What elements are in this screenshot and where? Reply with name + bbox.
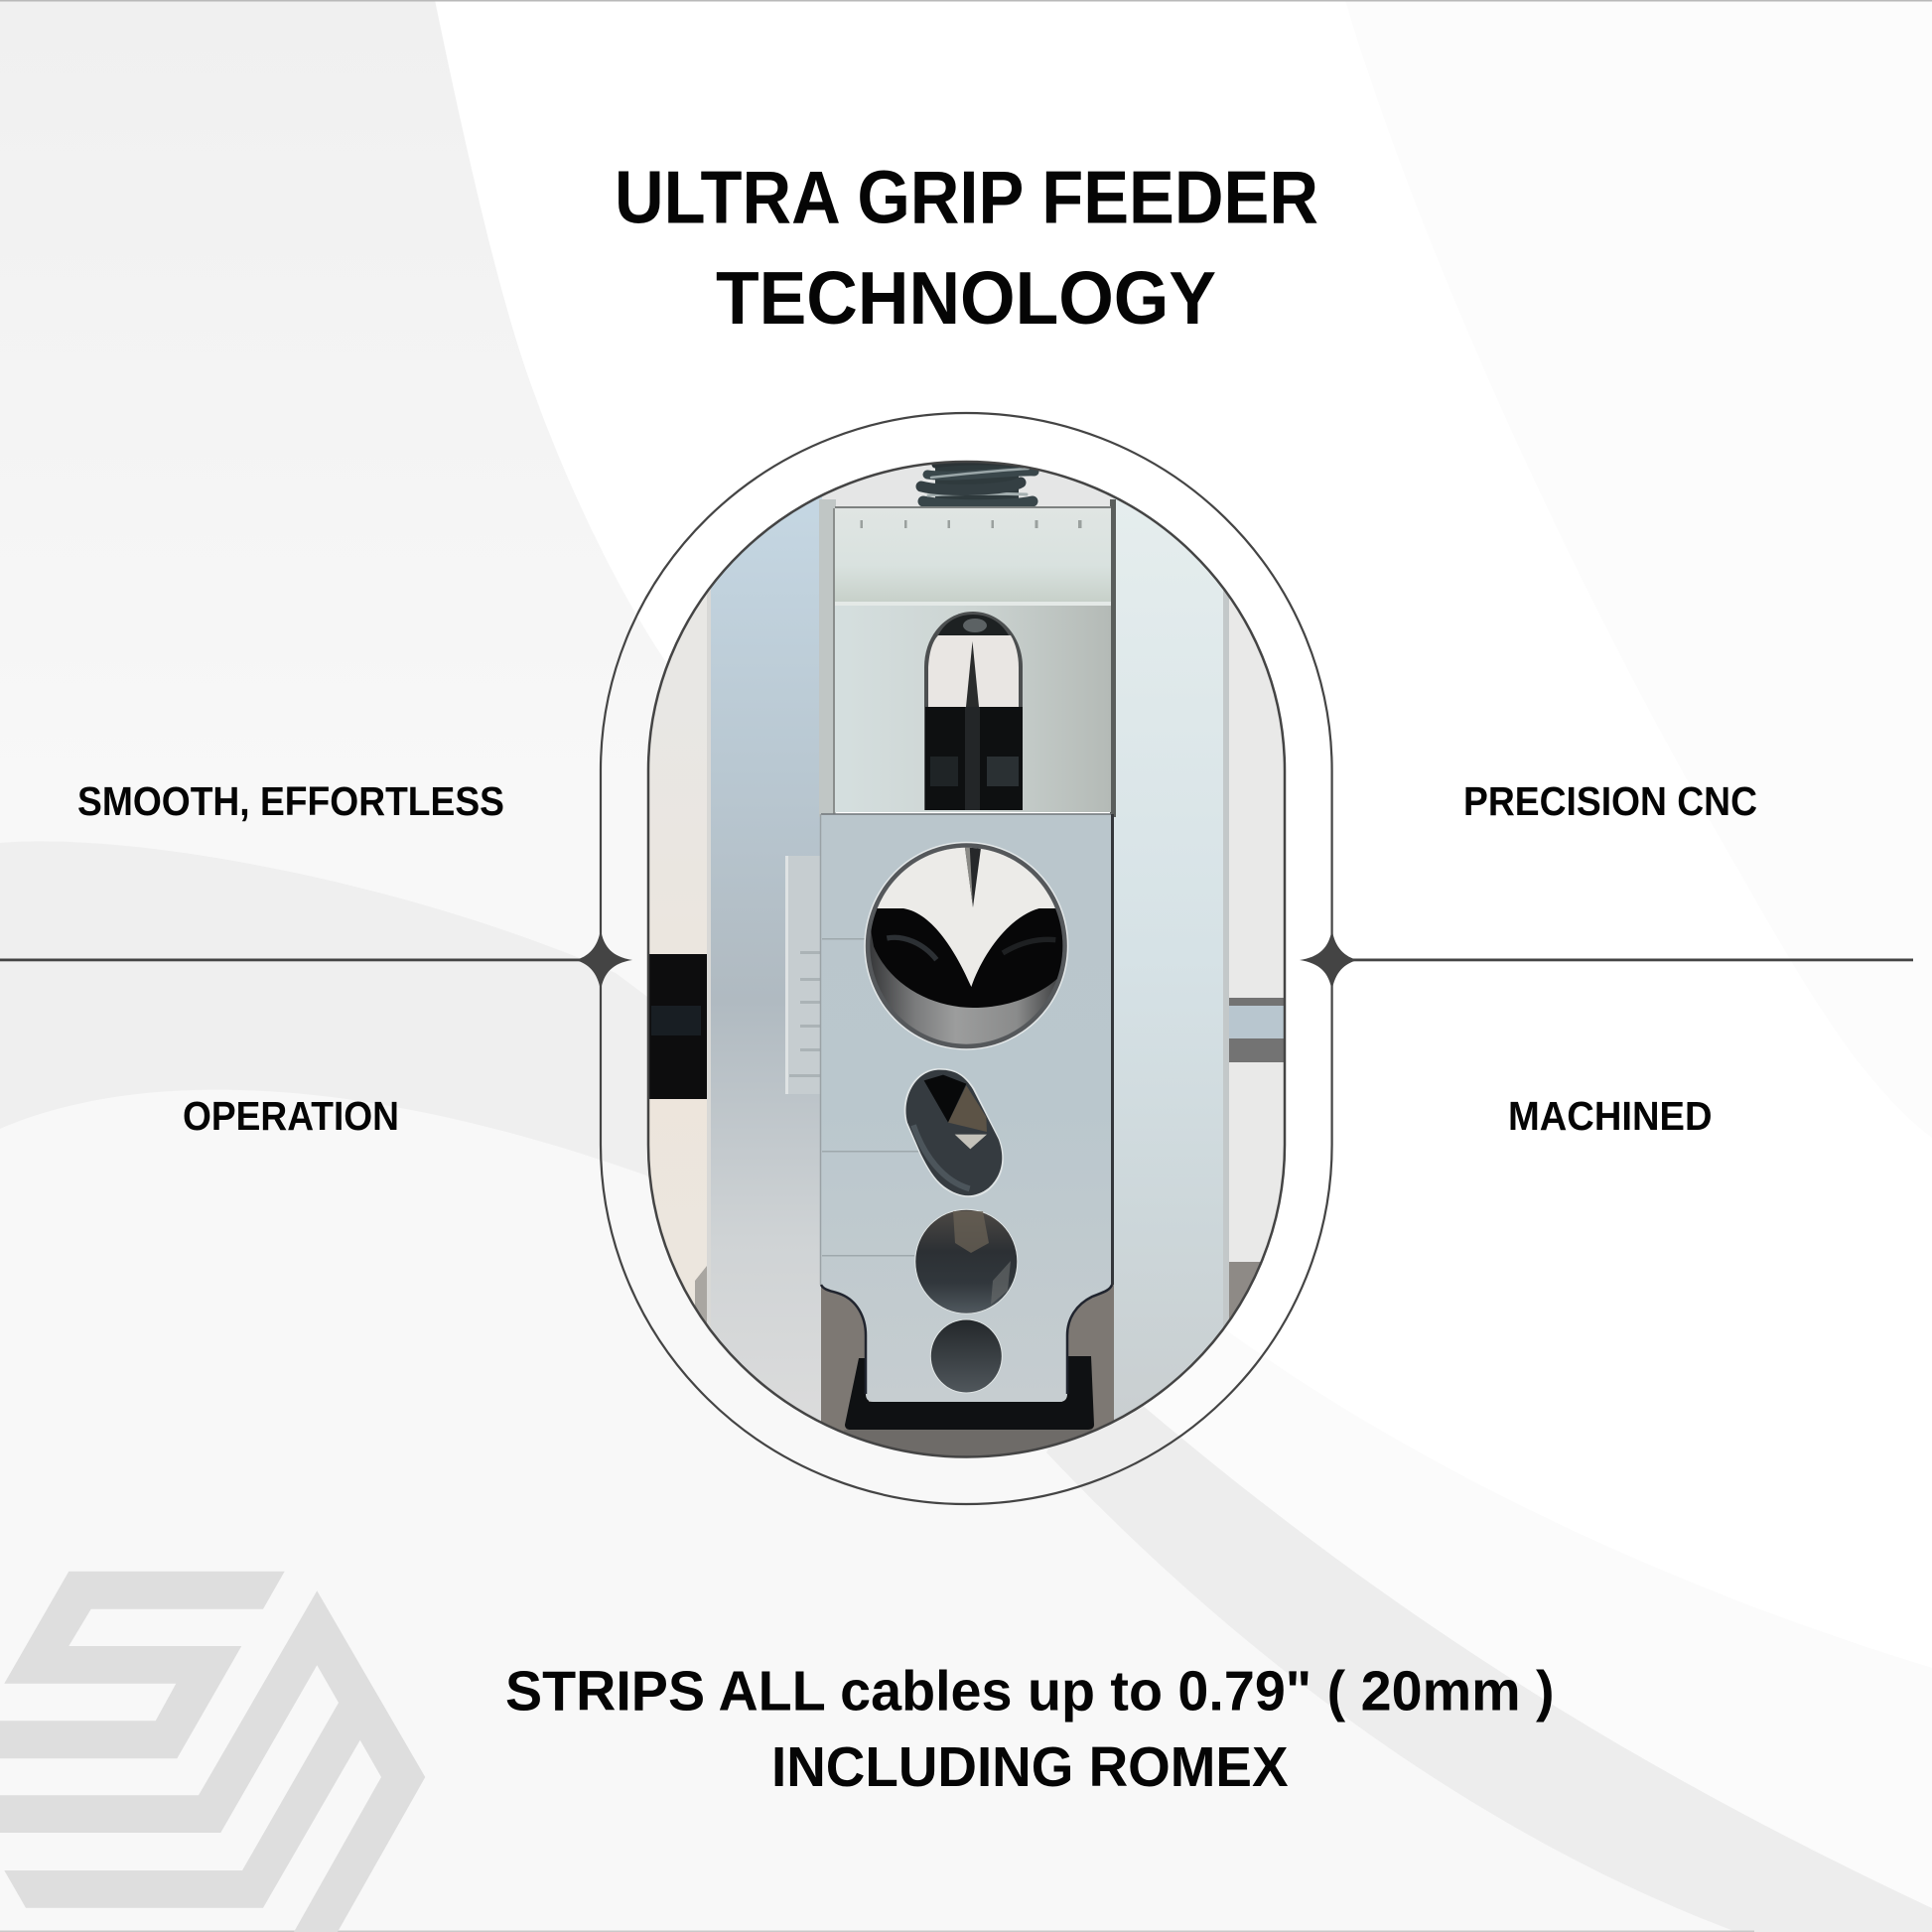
block edges: [820, 814, 1112, 1394]
left connector line with star: [0, 929, 632, 991]
logo watermark: [0, 1572, 425, 1932]
right label: precision cnc machined: MACHINED: [1508, 1093, 1712, 1139]
upper block: [835, 506, 1111, 812]
frame edges: [819, 499, 1116, 817]
tab on left rail: [785, 856, 821, 1094]
bottom statement: [505, 1660, 1555, 1799]
large hole with blade and leaves: [864, 842, 1068, 1050]
bottom statement: INCLUDING ROMEX: [771, 1735, 1289, 1799]
left label: smooth, effortless operation: SMOOTH, EFFORTLESS: [77, 778, 504, 824]
title: [615, 156, 1318, 340]
feed slot with wheel: [924, 612, 1023, 810]
title: TECHNOLOGY: [716, 256, 1216, 340]
right rail: [1114, 462, 1229, 1457]
tick marks: [860, 520, 1082, 528]
spring: [921, 462, 1035, 505]
right label: precision cnc machined: PRECISION CNC: [1463, 778, 1757, 824]
lower block body: [821, 814, 1112, 1402]
left black knob: [648, 954, 707, 1099]
right label: precision cnc machined: [1463, 778, 1757, 1139]
right rod: [1229, 998, 1285, 1062]
product photo: feeder mechanism: [648, 462, 1285, 1457]
inner pill outline: [648, 462, 1285, 1456]
bottom statement: STRIPS ALL cables up to 0.79" ( 20mm ): [505, 1660, 1555, 1724]
small hole: [930, 1318, 1003, 1394]
block grooves: [822, 938, 918, 1257]
right connector line with star: [1300, 929, 1913, 991]
lower notch background: [821, 1281, 1114, 1457]
left label: smooth, effortless operation: [77, 778, 504, 1139]
title: ULTRA GRIP FEEDER: [615, 156, 1318, 239]
left label: smooth, effortless operation: OPERATION: [183, 1093, 399, 1139]
black bracket: [845, 1356, 1094, 1430]
round hole: [914, 1209, 1018, 1314]
left rail: [707, 462, 822, 1457]
outer pill outline: [601, 413, 1332, 1504]
oval hole: [904, 1068, 1004, 1197]
